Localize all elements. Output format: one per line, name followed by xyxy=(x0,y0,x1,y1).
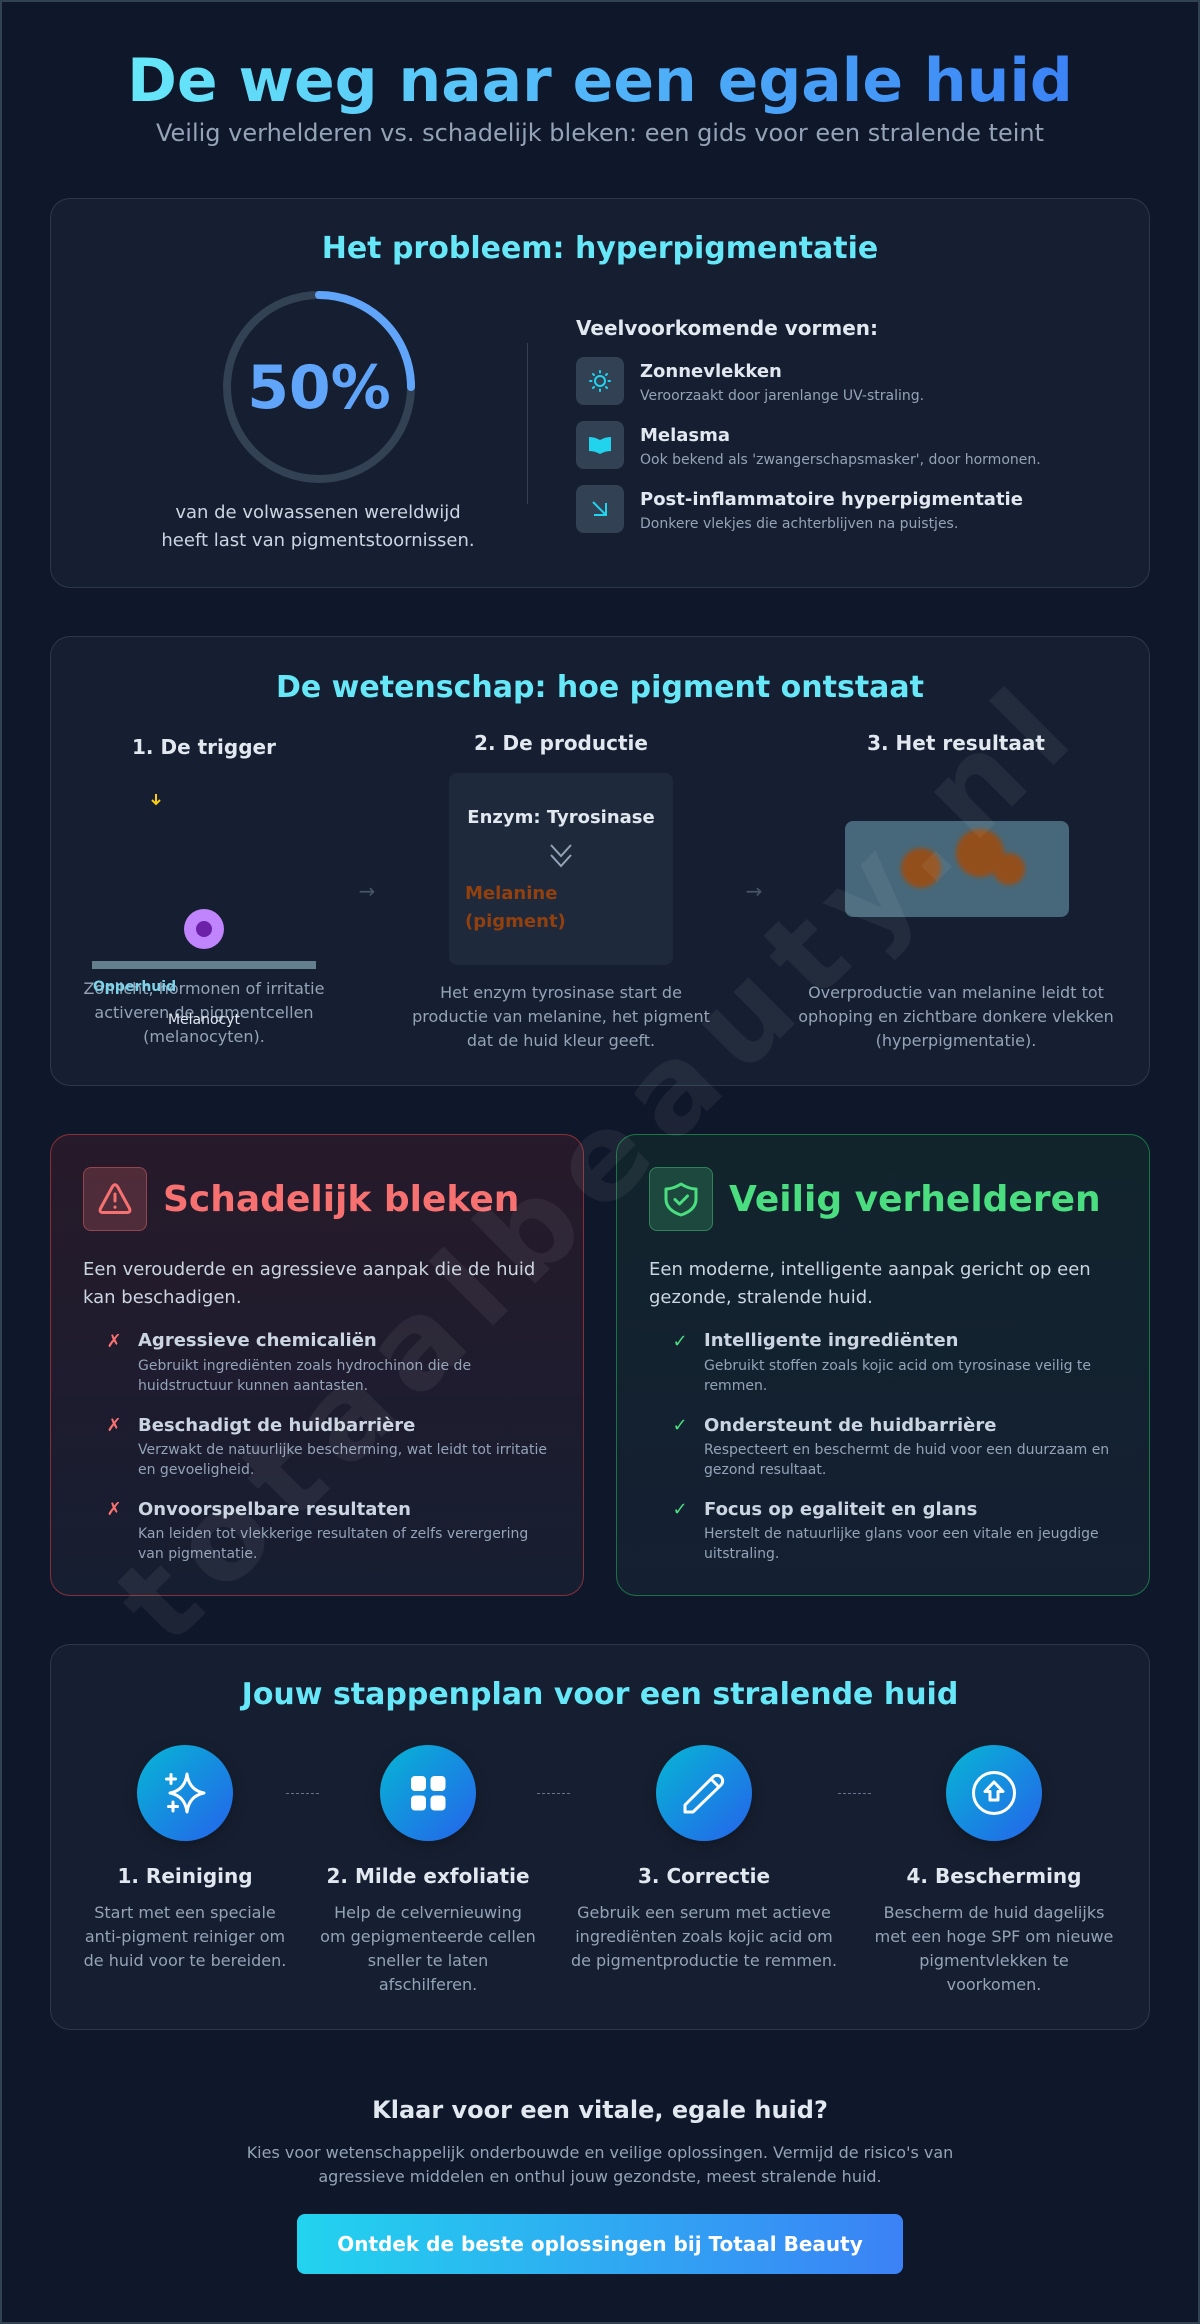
step text xyxy=(875,1903,1113,1994)
resultaat description: (hyperpigmentatie). xyxy=(876,1031,1036,1050)
heading: veilig verhelderen: Veilig verhelderen xyxy=(729,1179,1101,1220)
step text: afschilferen. xyxy=(379,1975,477,1994)
step text: pigmentvlekken te xyxy=(919,1951,1069,1970)
cta text: Kies voor wetenschappelijk onderbouwde en veilige oplossingen. Vermijd de risico's van xyxy=(247,2143,953,2162)
step title: 3. Correctie xyxy=(638,1864,770,1888)
item title: Onvoorspelbare resultaten xyxy=(138,1499,411,1520)
cta text xyxy=(247,2143,953,2186)
item text: uitstraling. xyxy=(704,1546,779,1562)
item text: Herstelt de natuurlijke glans voor een vitale en jeugdige xyxy=(704,1526,1099,1542)
step title: 1. Reiniging xyxy=(117,1864,253,1888)
icon: warning xyxy=(83,1167,147,1231)
intro text xyxy=(649,1259,1091,1308)
stat caption xyxy=(161,502,475,551)
cta button: Ontdek de beste oplossingen bij Totaal Beauty xyxy=(337,2232,863,2256)
stat caption: van de volwassenen wereldwijd xyxy=(175,502,461,523)
step text: sneller te laten xyxy=(368,1951,488,1970)
item text: remmen. xyxy=(704,1378,767,1394)
icon: arrow down right xyxy=(576,485,624,533)
cta heading: Klaar voor een vitale, egale huid? xyxy=(372,2096,828,2124)
form title: melasma: Melasma xyxy=(640,425,730,446)
icon: pencil xyxy=(656,1745,752,1841)
title: De weg naar een egale huid xyxy=(127,46,1073,116)
enzyme label: Enzym: Tyrosinase xyxy=(467,807,655,828)
form text: melasma: Ook bekend als 'zwangerschapsmasker', door hormonen. xyxy=(640,452,1041,468)
step text: Gebruik een serum met actieve xyxy=(577,1903,831,1922)
call to action xyxy=(247,2096,953,2274)
item text: van pigmentatie. xyxy=(138,1546,258,1562)
icon: shield xyxy=(649,1167,713,1231)
icon: melanocyte cell xyxy=(184,909,224,949)
item title: Intelligente ingrediënten xyxy=(704,1330,958,1351)
form title: post-inflammatoire: Post-inflammatoire hyperpigmentatie xyxy=(640,489,1023,510)
heading: stappenplan: Jouw stappenplan voor een stralende huid xyxy=(242,1677,958,1712)
arrow: → xyxy=(359,879,375,903)
marker: ✓ xyxy=(672,1499,688,1520)
item text xyxy=(704,1526,1099,1562)
chart: 50 percent ring xyxy=(223,291,415,483)
marker: ✗ xyxy=(106,1331,122,1352)
step text: met een hoge SPF om nieuwe xyxy=(875,1927,1113,1946)
productie description: productie van melanine, het pigment xyxy=(412,1007,710,1026)
step text: voorkomen. xyxy=(947,1975,1041,1994)
step title: 2. Milde exfoliatie xyxy=(326,1864,530,1888)
melanine label: Melanine xyxy=(465,883,557,904)
icon: sparkle xyxy=(137,1745,233,1841)
connector xyxy=(838,1793,871,1794)
heading: vormen: Veelvoorkomende vormen: xyxy=(576,316,878,340)
heading: schadelijk bleken: Schadelijk bleken xyxy=(163,1179,519,1220)
icon: up arrow in circle xyxy=(946,1745,1042,1841)
panel: veilig verhelderen xyxy=(616,1134,1150,1596)
heading: het probleem: Het probleem: hyperpigmentatie xyxy=(322,231,878,266)
connector xyxy=(537,1793,570,1794)
resultaat description: Overproductie van melanine leidt tot xyxy=(808,983,1104,1002)
cta button xyxy=(297,2214,903,2274)
step text: anti-pigment reiniger om xyxy=(85,1927,285,1946)
panel: het probleem xyxy=(50,198,1150,588)
skin surface bar xyxy=(92,961,316,969)
trigger description xyxy=(84,979,324,1046)
cta text: agressieve middelen en onthul jouw gezondste, meest stralende huid. xyxy=(318,2167,882,2186)
icon: double chevron xyxy=(550,844,572,868)
step text: om gepigmenteerde cellen xyxy=(320,1927,536,1946)
arrow: → xyxy=(746,879,762,903)
form text: zonnevlekken: Veroorzaakt door jarenlange UV-straling. xyxy=(640,388,924,404)
item text xyxy=(138,1358,471,1394)
item text xyxy=(704,1358,1091,1394)
icon: book xyxy=(576,421,624,469)
subtitle: Veilig verhelderen vs. schadelijk bleken: een gids voor een stralende teint xyxy=(156,119,1044,147)
panel: stappenplan xyxy=(50,1644,1150,2030)
trigger description: (melanocyten). xyxy=(143,1027,265,1046)
item title: Ondersteunt de huidbarrière xyxy=(704,1415,996,1436)
step text xyxy=(571,1903,837,1970)
chart: 50 percent ring: 50% xyxy=(247,353,391,423)
item text xyxy=(704,1442,1109,1478)
intro text: gezonde, stralende huid. xyxy=(649,1287,873,1308)
watermark: totaalbeauty.nl xyxy=(91,653,1109,1671)
step text xyxy=(84,1903,286,1970)
item text: Kan leiden tot vlekkerige resultaten of zelfs verergering xyxy=(138,1526,528,1542)
step text: Start met een speciale xyxy=(94,1903,276,1922)
icon: sun xyxy=(576,357,624,405)
marker: ✗ xyxy=(106,1499,122,1520)
label: opperhuid: Opperhuid xyxy=(93,979,176,995)
intro text xyxy=(83,1259,535,1308)
item text: en gevoeligheid. xyxy=(138,1462,254,1478)
item title: Agressieve chemicaliën xyxy=(138,1330,377,1351)
item text xyxy=(138,1526,528,1562)
icon: grid xyxy=(380,1745,476,1841)
intro text: Een moderne, intelligente aanpak gericht op een xyxy=(649,1259,1091,1280)
icon: yellow arrow xyxy=(151,794,161,806)
step heading: trigger: 1. De trigger xyxy=(132,735,276,759)
enzyme box xyxy=(449,773,673,965)
step text: de huid voor te bereiden. xyxy=(84,1951,286,1970)
trigger description: activeren de pigmentcellen xyxy=(94,1003,314,1022)
melanine label: (pigment) xyxy=(465,911,566,932)
item text xyxy=(138,1442,547,1478)
step heading: productie: 2. De productie xyxy=(474,731,648,755)
stat caption: heeft last van pigmentstoornissen. xyxy=(161,530,475,551)
productie description: dat de huid kleur geeft. xyxy=(467,1031,655,1050)
step text: de pigmentproductie te remmen. xyxy=(571,1951,837,1970)
item text: Gebruikt stoffen zoals kojic acid om tyrosinase veilig te xyxy=(704,1358,1091,1374)
form text: post-inflammatoire: Donkere vlekjes die achterblijven na puistjes. xyxy=(640,516,958,532)
panel: de wetenschap xyxy=(50,636,1150,1086)
resultaat description: ophoping en zichtbare donkere vlekken xyxy=(798,1007,1114,1026)
skin with dark spots xyxy=(845,821,1069,917)
item text: Verzwakt de natuurlijke bescherming, wat leidt tot irritatie xyxy=(138,1442,547,1458)
heading: de wetenschap: De wetenschap: hoe pigment ontstaat xyxy=(276,670,924,705)
melanine label xyxy=(465,883,566,932)
item text: huidstructuur kunnen aantasten. xyxy=(138,1378,368,1394)
marker: ✓ xyxy=(672,1331,688,1352)
panel: schadelijk bleken xyxy=(50,1134,584,1596)
step text xyxy=(320,1903,536,1994)
intro text: Een verouderde en agressieve aanpak die de huid xyxy=(83,1259,535,1280)
marker: ✓ xyxy=(672,1415,688,1436)
item text: Gebruikt ingrediënten zoals hydrochinon die de xyxy=(138,1358,471,1374)
resultaat description xyxy=(798,983,1114,1050)
productie description xyxy=(412,983,710,1050)
item text: Respecteert en beschermt de huid voor een duurzaam en xyxy=(704,1442,1109,1458)
intro text: kan beschadigen. xyxy=(83,1287,242,1308)
step text: Help de celvernieuwing xyxy=(334,1903,522,1922)
connector xyxy=(286,1793,319,1794)
item title: Focus op egaliteit en glans xyxy=(704,1499,977,1520)
header xyxy=(127,46,1073,147)
item title: Beschadigt de huidbarrière xyxy=(138,1415,415,1436)
form title: zonnevlekken: Zonnevlekken xyxy=(640,361,782,382)
marker: ✗ xyxy=(106,1415,122,1436)
trigger description: Zonlicht, hormonen of irritatie xyxy=(84,979,324,998)
step heading: resultaat: 3. Het resultaat xyxy=(867,731,1045,755)
item text: gezond resultaat. xyxy=(704,1462,826,1478)
step text: ingrediënten zoals kojic acid om xyxy=(575,1927,833,1946)
step text: Bescherm de huid dagelijks xyxy=(884,1903,1104,1922)
productie description: Het enzym tyrosinase start de xyxy=(440,983,682,1002)
step title: 4. Bescherming xyxy=(907,1864,1081,1888)
label: melanocyt: Melanocyt xyxy=(168,1012,240,1028)
